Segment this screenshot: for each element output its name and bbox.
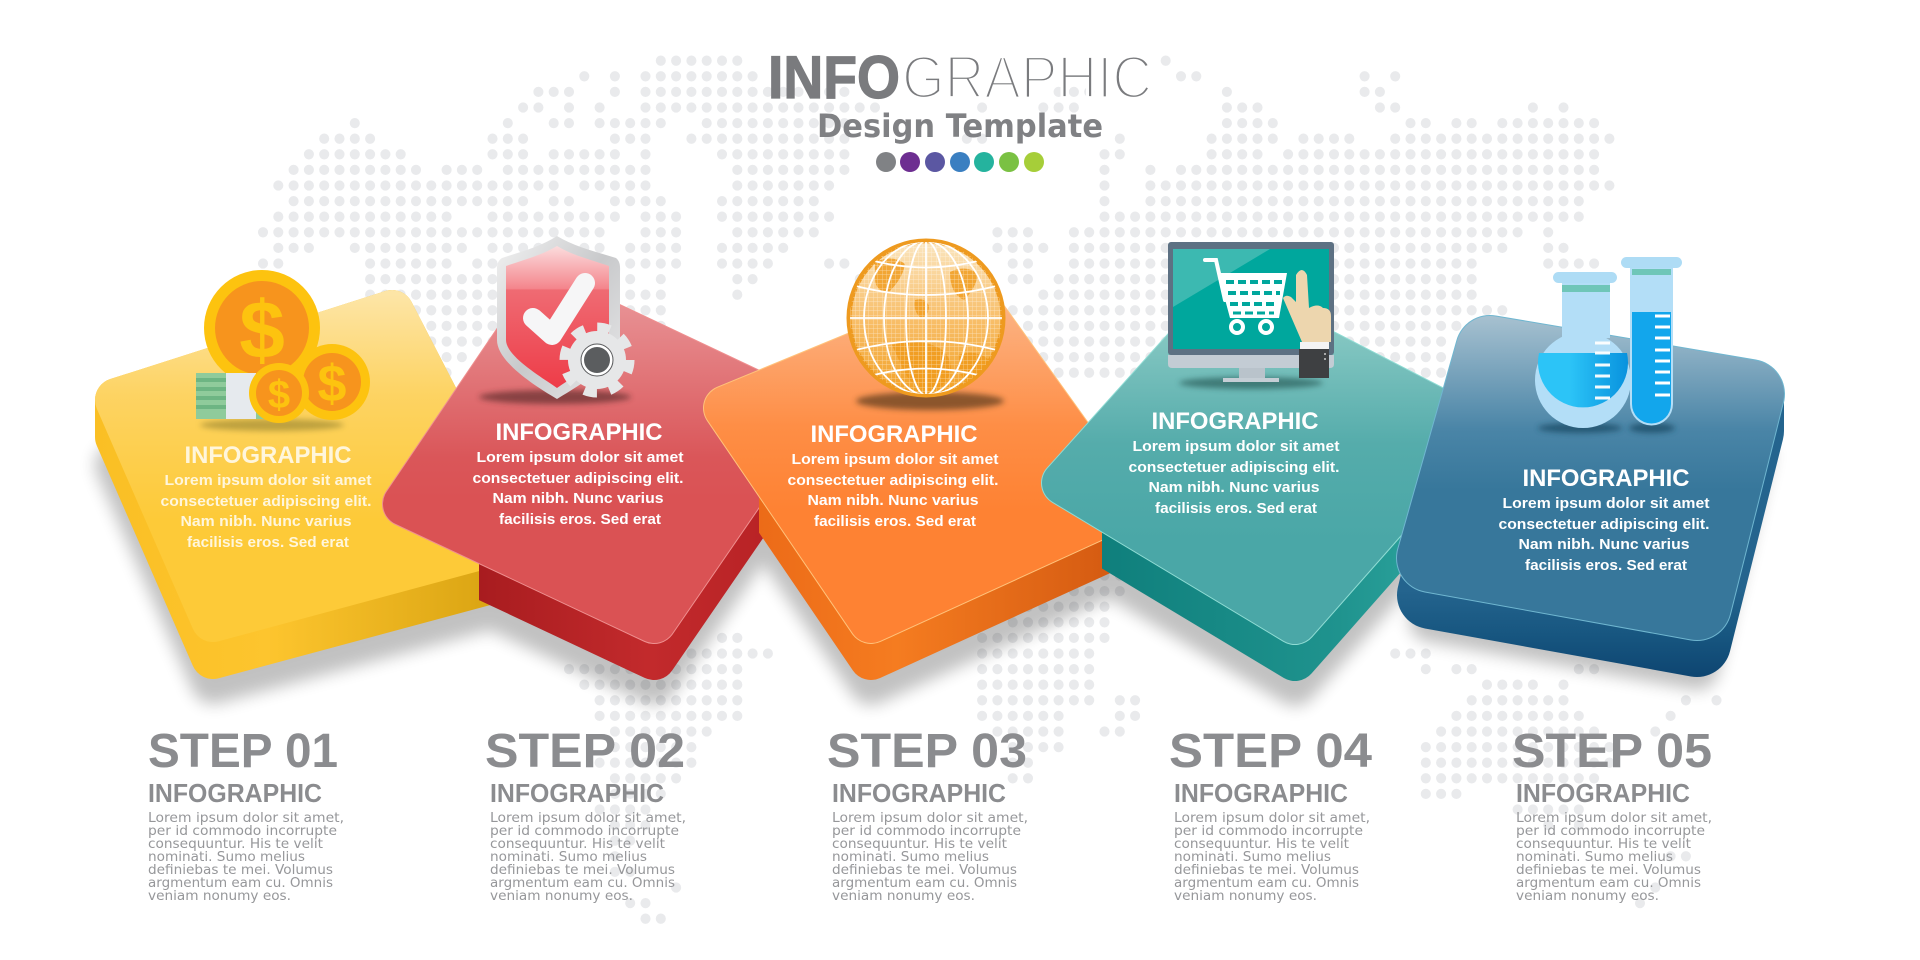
text block: step 03: nominati. Sumo melius bbox=[832, 849, 989, 865]
text block: step 05: per id commodo incorrupte bbox=[1516, 823, 1705, 839]
text block: card 5: INFOGRAPHIC bbox=[1522, 465, 1690, 492]
text block: card 1 bbox=[160, 442, 372, 551]
text block: step 03: STEP 03 bbox=[827, 725, 1027, 778]
text block: step 01: nominati. Sumo melius bbox=[148, 849, 305, 865]
text block: card 3: consectetuer adipiscing elit. bbox=[788, 472, 998, 489]
text block: step 02: definiebas te mei. Volumus bbox=[490, 862, 675, 878]
text block: card 2: INFOGRAPHIC bbox=[496, 419, 662, 446]
text block: card 1: Lorem ipsum dolor sit amet bbox=[164, 472, 372, 489]
red card face bbox=[405, 295, 797, 621]
text block: step 05: veniam nonumy eos. bbox=[1516, 888, 1659, 904]
blue card face bbox=[1431, 350, 1750, 606]
text block: step 02: Lorem ipsum dolor sit amet, bbox=[490, 810, 686, 826]
text block: step 05: definiebas te mei. Volumus bbox=[1516, 862, 1701, 878]
title word: GRAPHIC: GRAPHIC bbox=[902, 44, 1152, 111]
icon: shield with check and gear bbox=[479, 236, 631, 404]
text block: step 03: consequuntur. His te velit bbox=[832, 836, 1007, 852]
orange card side bbox=[759, 498, 1110, 680]
text block: card 5: facilisis eros. Sed erat bbox=[1525, 557, 1687, 574]
teal card side bbox=[1102, 532, 1400, 681]
text block: step 04: argmentum eam cu. Omnis bbox=[1174, 875, 1359, 891]
text block: card 1: Nam nibh. Nunc varius bbox=[180, 513, 352, 530]
text block: card 5: Lorem ipsum dolor sit amet bbox=[1502, 495, 1710, 512]
text block: card 4: INFOGRAPHIC bbox=[1152, 408, 1318, 435]
panel: step 2 red card bbox=[405, 295, 797, 658]
yellow card side bbox=[117, 312, 510, 657]
text block: step 04: STEP 04 bbox=[1169, 725, 1372, 778]
text block: card 4: Nam nibh. Nunc varius bbox=[1148, 479, 1320, 496]
text block: step 01: Lorem ipsum dolor sit amet, bbox=[148, 810, 344, 826]
orange card face bbox=[726, 305, 1121, 621]
text block: step 03: INFOGRAPHIC bbox=[832, 778, 1006, 808]
panel: step 1 yellow card bbox=[117, 312, 510, 657]
text block: card 4 bbox=[1128, 408, 1340, 517]
title word: INFO: INFO bbox=[768, 44, 900, 111]
text block: step 04: consequuntur. His te velit bbox=[1174, 836, 1349, 852]
title bbox=[768, 44, 1152, 111]
text block: card 2: facilisis eros. Sed erat bbox=[499, 511, 661, 528]
icon: coins and cash bbox=[196, 270, 370, 431]
icon: monitor with shopping cart and hand bbox=[1168, 242, 1334, 389]
text block: step 04: INFOGRAPHIC bbox=[1174, 778, 1348, 808]
text block: step 02: nominati. Sumo melius bbox=[490, 849, 647, 865]
text block: card 3: Nam nibh. Nunc varius bbox=[808, 492, 978, 509]
text block: card 3: INFOGRAPHIC bbox=[810, 421, 978, 448]
text block: step 03: definiebas te mei. Volumus bbox=[832, 862, 1017, 878]
world map dot background bbox=[263, 61, 1717, 919]
icon: coins and cash: $ bbox=[239, 285, 285, 376]
icon: coins and cash: $ bbox=[268, 373, 290, 417]
text block: step 03 bbox=[827, 725, 1028, 904]
text block: step 01: STEP 01 bbox=[148, 725, 338, 778]
text block: step 01: veniam nonumy eos. bbox=[148, 888, 291, 904]
text block: card 1: consectetuer adipiscing elit. bbox=[160, 493, 372, 510]
text block: step 01: definiebas te mei. Volumus bbox=[148, 862, 333, 878]
panel: step 5 blue card bbox=[1431, 350, 1750, 643]
text block: card 1: INFOGRAPHIC bbox=[184, 442, 352, 469]
text block: step 04: per id commodo incorrupte bbox=[1174, 823, 1363, 839]
text block: step 02: argmentum eam cu. Omnis bbox=[490, 875, 675, 891]
text block: step 05: STEP 05 bbox=[1512, 725, 1712, 778]
icon: wireframe globe bbox=[846, 238, 1006, 410]
text block: card 2: consectetuer adipiscing elit. bbox=[472, 470, 684, 487]
text block: step 02: veniam nonumy eos. bbox=[490, 888, 633, 904]
text block: step 01: argmentum eam cu. Omnis bbox=[148, 875, 333, 891]
icon: flask and test tube bbox=[1535, 257, 1682, 433]
blue card side bbox=[1431, 350, 1750, 643]
text block: step 02: INFOGRAPHIC bbox=[490, 778, 664, 808]
colour dots row bbox=[876, 152, 1044, 172]
text block: step 04: nominati. Sumo melius bbox=[1174, 849, 1331, 865]
text block: step 02: STEP 02 bbox=[485, 725, 685, 778]
panel: step 3 orange card bbox=[726, 305, 1121, 658]
text block: card 1: facilisis eros. Sed erat bbox=[187, 534, 349, 551]
text block: step 03: per id commodo incorrupte bbox=[832, 823, 1021, 839]
text block: step 05: Lorem ipsum dolor sit amet, bbox=[1516, 810, 1712, 826]
teal card face bbox=[1064, 302, 1468, 622]
text block: step 04: veniam nonumy eos. bbox=[1174, 888, 1317, 904]
text block: step 01: per id commodo incorrupte bbox=[148, 823, 337, 839]
text block: step 03: Lorem ipsum dolor sit amet, bbox=[832, 810, 1028, 826]
text block: step 04: Lorem ipsum dolor sit amet, bbox=[1174, 810, 1370, 826]
text block: step 01: INFOGRAPHIC bbox=[148, 778, 322, 808]
text block: card 2: Lorem ipsum dolor sit amet bbox=[476, 449, 684, 466]
text block: card 4: consectetuer adipiscing elit. bbox=[1128, 459, 1340, 476]
text block: card 4: facilisis eros. Sed erat bbox=[1155, 500, 1317, 517]
text block: step 02: consequuntur. His te velit bbox=[490, 836, 665, 852]
text block: card 2: Nam nibh. Nunc varius bbox=[492, 490, 664, 507]
panel: step 4 teal card bbox=[1064, 302, 1468, 659]
text block: card 3: Lorem ipsum dolor sit amet bbox=[792, 451, 999, 468]
text block: card 3 bbox=[788, 421, 999, 530]
yellow card face bbox=[117, 312, 510, 620]
text block: card 3: facilisis eros. Sed erat bbox=[814, 513, 976, 530]
text block: step 01: consequuntur. His te velit bbox=[148, 836, 323, 852]
text block: card 5: Nam nibh. Nunc varius bbox=[1518, 536, 1690, 553]
text block: step 05: INFOGRAPHIC bbox=[1516, 778, 1690, 808]
text block: step 01 bbox=[148, 725, 344, 904]
text block: step 03: argmentum eam cu. Omnis bbox=[832, 875, 1017, 891]
text block: step 05: nominati. Sumo melius bbox=[1516, 849, 1673, 865]
text block: step 05 bbox=[1512, 725, 1712, 904]
text block: step 04: definiebas te mei. Volumus bbox=[1174, 862, 1359, 878]
text block: step 02: per id commodo incorrupte bbox=[490, 823, 679, 839]
red card side bbox=[479, 509, 763, 680]
text block: card 4: Lorem ipsum dolor sit amet bbox=[1132, 438, 1340, 455]
text block: card 2 bbox=[472, 419, 684, 528]
text block: step 05: argmentum eam cu. Omnis bbox=[1516, 875, 1701, 891]
text block: step 04 bbox=[1169, 725, 1372, 904]
text block: card 5 bbox=[1498, 465, 1710, 574]
icon: coins and cash: $ bbox=[318, 355, 347, 413]
subtitle: Design Template bbox=[817, 107, 1103, 145]
text block: card 5: consectetuer adipiscing elit. bbox=[1498, 516, 1710, 533]
text block: step 02 bbox=[485, 725, 686, 904]
text block: step 05: consequuntur. His te velit bbox=[1516, 836, 1691, 852]
text block: step 03: veniam nonumy eos. bbox=[832, 888, 975, 904]
card shadows bbox=[117, 456, 1750, 684]
